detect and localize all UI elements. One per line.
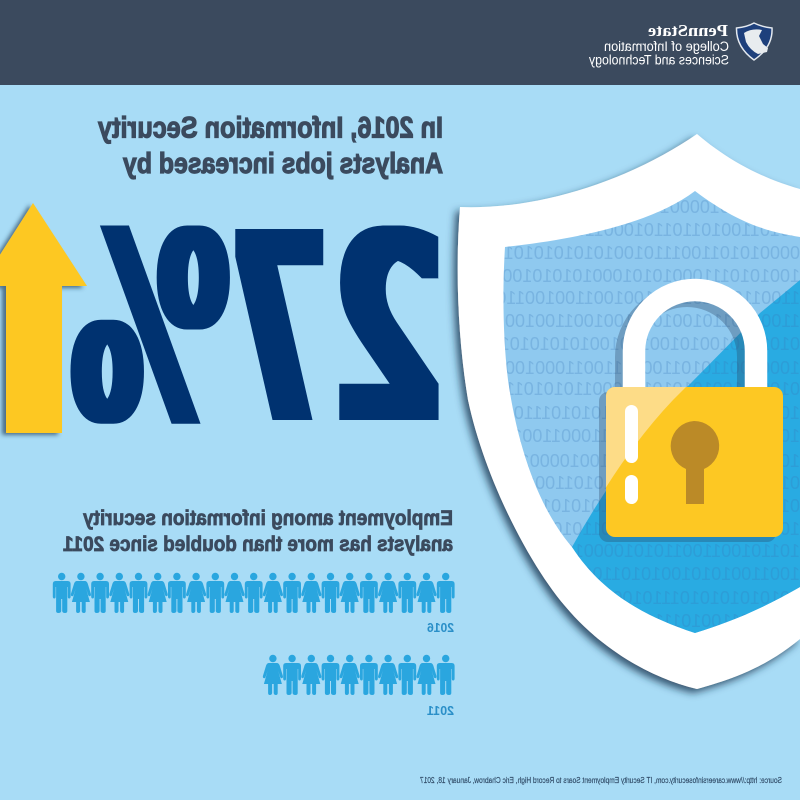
binary pattern: 101001001010101001010010000101000000 xyxy=(440,451,800,471)
logo text: Sciences and Technology xyxy=(589,52,729,68)
binary pattern: 010011100101010100000110101011010110 xyxy=(446,379,800,399)
sub-heading xyxy=(63,506,453,556)
binary pattern: 000010101100111010010101010101001101 xyxy=(445,243,800,263)
percent sign: % xyxy=(71,176,229,482)
header band xyxy=(0,0,800,85)
binary pattern: 100110010101001010110101001100101110 xyxy=(446,564,800,584)
binary pattern: 101101001100110101000010101010111010 xyxy=(446,541,800,561)
binary pattern: 110011010101001100100110010011010101 xyxy=(446,288,800,308)
pictogram row: 2016 xyxy=(53,573,455,613)
arrow: yellow up arrow xyxy=(0,203,87,433)
binary pattern xyxy=(504,200,800,627)
headline: In 2016, Information Security xyxy=(98,112,443,144)
keyhole xyxy=(671,421,719,504)
body shadow xyxy=(599,392,776,542)
sub-heading: analysts has more than doubled since 2011 xyxy=(63,532,453,556)
headline: Analysts jobs increased by xyxy=(123,148,443,180)
icon: security shield with padlock xyxy=(440,134,800,689)
headline xyxy=(98,112,443,180)
binary pattern: 100101011100010101000101010100100011 xyxy=(444,266,800,286)
binary pattern: 110010011010010011001001100100110100 xyxy=(446,311,800,331)
logo text: College of Information xyxy=(604,39,729,54)
logo text xyxy=(589,21,729,68)
binary pattern: 011010110101010011010101100110100101 xyxy=(446,473,800,493)
label: 2016: 2016 xyxy=(427,620,454,635)
binary pattern: 101010110010111001010010011010101011 xyxy=(446,611,800,631)
source line: Source: http://www.careersinfosecurity.com, IT Security Employment Soars to Record High, Eric Chabrow, January 18, 2017 xyxy=(420,776,782,785)
binary pattern: 010101001000010101010001011010101000 xyxy=(441,197,800,217)
digits 27: 2 xyxy=(334,176,443,482)
binary pattern: 101010101010101011010101011101100110 xyxy=(446,403,800,423)
padlock xyxy=(599,290,783,542)
big statistic 27% xyxy=(71,176,443,482)
binary pattern: 100101010010001001011000110011001000 xyxy=(444,426,800,446)
shackle xyxy=(634,290,756,392)
digits 27 xyxy=(233,176,443,482)
digits 27: 7 xyxy=(233,177,324,482)
shield inner panel xyxy=(503,191,800,633)
shackle shadow xyxy=(626,296,748,400)
lock body xyxy=(606,387,783,537)
binary pattern: 101010101010110101001101010110010011 xyxy=(445,519,800,539)
label: 2011: 2011 xyxy=(427,703,454,718)
highlight stripe xyxy=(625,405,638,463)
lock highlight xyxy=(606,387,686,488)
highlight dot xyxy=(625,475,638,504)
binary pattern: 100010011010110010110011000100110101 xyxy=(446,358,800,378)
binary pattern: 010101010010100100100101010101110011 xyxy=(444,334,800,354)
icon: Penn State shield logo xyxy=(736,23,772,60)
pictogram row: 2011 xyxy=(263,655,455,695)
binary pattern: 001010101010111010010100111010100100 xyxy=(445,588,800,608)
binary pattern: 101011001011011010001101010110100110 xyxy=(448,220,800,240)
shield outer white xyxy=(458,134,800,689)
binary pattern: 010101001010010100110101010101010111 xyxy=(444,496,800,516)
logo text: PennState xyxy=(648,21,728,40)
sub-heading: Employment among information security xyxy=(83,506,453,530)
